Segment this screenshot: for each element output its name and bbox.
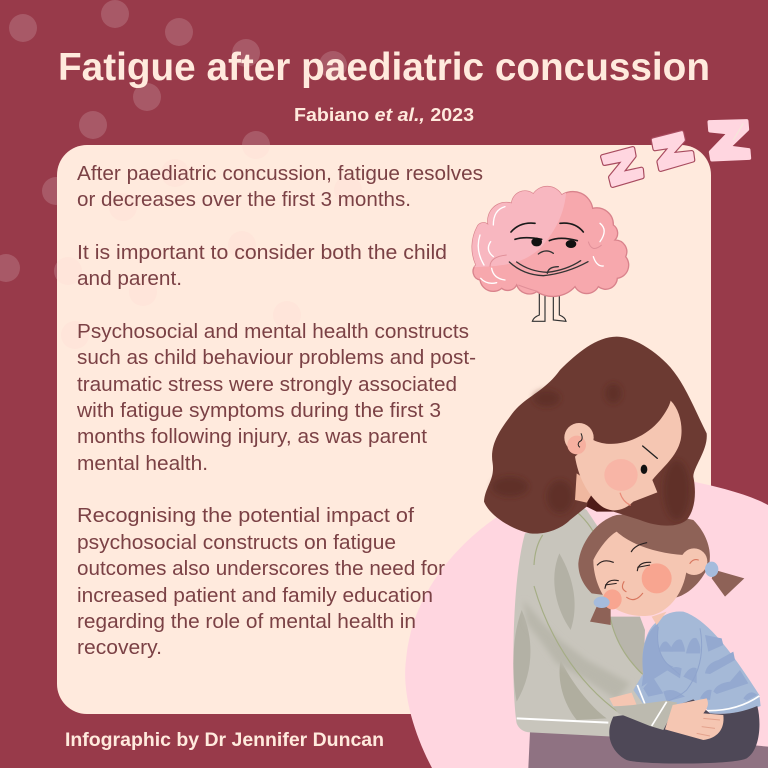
- title: Fatigue after paediatric concussion: [58, 46, 710, 89]
- child's face: [593, 532, 687, 616]
- child: [578, 512, 761, 764]
- mother's hair: [484, 337, 707, 534]
- mother's sweater: [513, 500, 677, 737]
- text block: fatigue resolves: [77, 163, 483, 211]
- mother's face: [575, 401, 682, 510]
- text block: recognising impact: psychosocial constructs on fatigue: [77, 532, 396, 554]
- text block: recognising impact: increased patient and family education: [77, 585, 433, 607]
- child's jumper: [633, 611, 761, 714]
- text block: fatigue resolves: After paediatric concussion, fatigue resolves: [77, 163, 483, 185]
- mother's hand: [665, 698, 724, 740]
- text block: recognising impact: [77, 505, 445, 659]
- illustration: mother hugging child: [484, 337, 768, 768]
- text block: child and parent: [77, 242, 447, 290]
- icon: sleepy brain character: [467, 177, 629, 321]
- panel: main text card: [57, 145, 711, 714]
- footer credit: Infographic by Dr Jennifer Duncan: [65, 730, 384, 751]
- icon: sleeping Z letters: [603, 121, 749, 185]
- text block: psychosocial constructs: months following injury, as was parent: [77, 426, 427, 448]
- text block: psychosocial constructs: traumatic stress were strongly associated: [77, 374, 457, 396]
- text block: recognising impact: regarding the role of mental health in: [77, 611, 416, 633]
- mother's sleeve: [613, 701, 677, 730]
- citation: Fabiano et al., 2023: [294, 105, 474, 125]
- mother's trousers: [528, 732, 768, 768]
- text block: psychosocial constructs: with fatigue symptoms during the first 3: [76, 400, 441, 422]
- text block: child and parent: It is important to consider both the child: [77, 242, 447, 264]
- text block: recognising impact: Recognising the potential impact of: [77, 505, 414, 527]
- text block: psychosocial constructs: Psychosocial and mental health constructs: [77, 321, 469, 343]
- shadow under mother's chin: [587, 493, 613, 512]
- text block: recognising impact: recovery.: [77, 637, 162, 659]
- pink background blob: [405, 477, 768, 768]
- text block: psychosocial constructs: mental health.: [77, 453, 208, 475]
- text block: psychosocial constructs: such as child behaviour problems and post-: [77, 347, 476, 369]
- child's hand: [609, 693, 637, 707]
- text block: recognising impact: outcomes also underscores the need for: [77, 558, 445, 580]
- brain eyes: [531, 238, 576, 248]
- text block: child and parent: and parent.: [77, 268, 182, 290]
- child's legs: [609, 699, 759, 764]
- text block: fatigue resolves: or decreases over the first 3 months.: [77, 189, 411, 211]
- mother's neck: [575, 473, 597, 503]
- text block: psychosocial constructs: [76, 321, 476, 475]
